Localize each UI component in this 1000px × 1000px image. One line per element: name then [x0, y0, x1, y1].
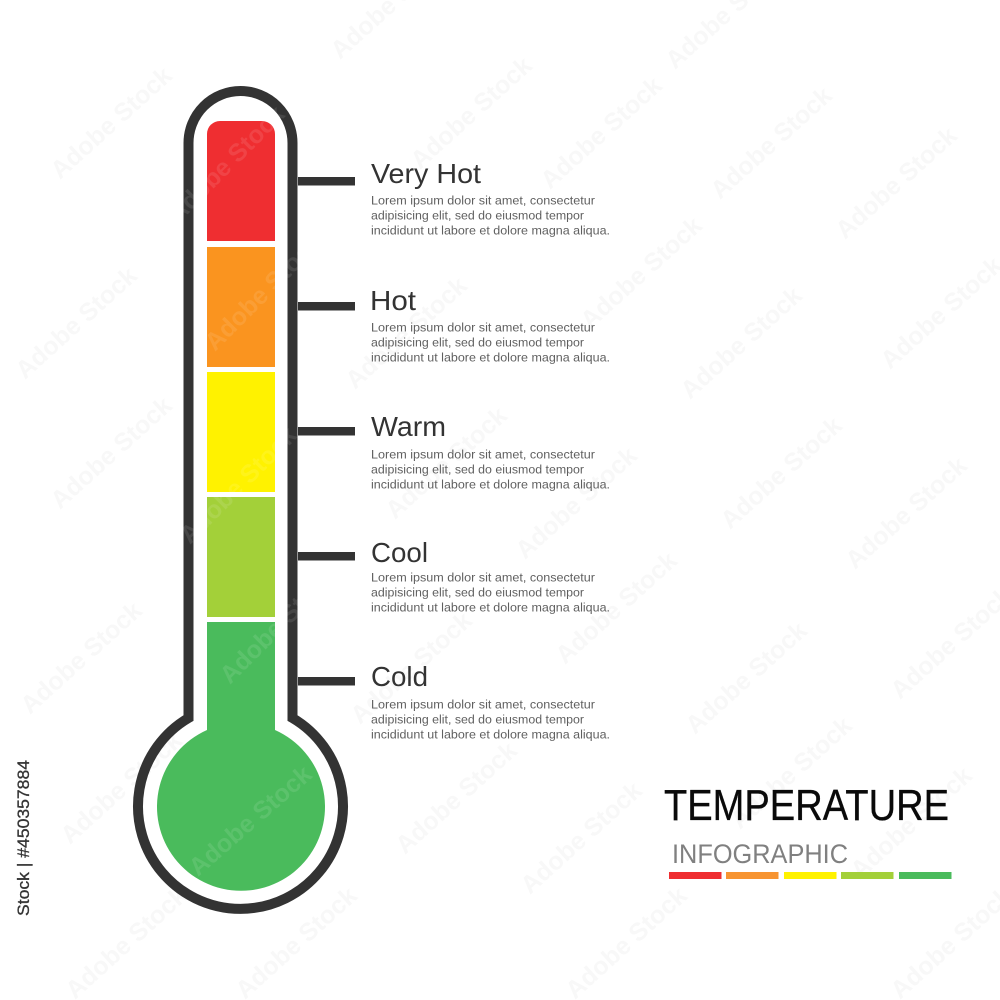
text: Adobe Stock [45, 391, 178, 514]
bar: green [899, 872, 952, 879]
text: Adobe Stock [162, 100, 290, 228]
description: very hot: adipisicing elit, sed do eiusmod tempor [371, 208, 584, 222]
segment: warm [207, 372, 275, 492]
label block: warm [371, 411, 610, 492]
text: Adobe Stock [845, 761, 978, 884]
bar: orange [726, 872, 778, 879]
heading: warm: Warm [371, 411, 446, 442]
text: Adobe Stock [405, 51, 538, 174]
bar: light green [841, 872, 894, 879]
text: Adobe Stock [840, 451, 973, 574]
subtitle: infographic: INFOGRAPHIC [672, 839, 848, 869]
text: Adobe Stock [199, 228, 327, 356]
text: Adobe Stock [390, 736, 523, 859]
description: warm: Lorem ipsum dolor sit amet, consectetur [371, 448, 595, 462]
title: temperature: TEMPERATURE [664, 781, 949, 830]
text: Adobe Stock [575, 211, 708, 334]
text: Adobe Stock [174, 421, 302, 549]
description: very hot: incididunt ut labore et dolore magna aliqua. [371, 224, 610, 238]
label block: hot [370, 285, 610, 364]
text: Adobe Stock [535, 71, 668, 194]
text: Adobe Stock [45, 61, 178, 184]
description: hot: incididunt ut labore et dolore magna aliqua. [371, 350, 610, 364]
tick: warm [298, 427, 355, 436]
text: Adobe Stock [680, 616, 813, 739]
description: cool: incididunt ut labore et dolore magna aliqua. [371, 600, 610, 614]
tick: cool [298, 552, 355, 560]
label block: cool [371, 537, 610, 614]
text: Adobe Stock [830, 121, 963, 244]
description: warm: adipisicing elit, sed do eiusmod tempor [371, 462, 584, 476]
text: Adobe Stock [550, 546, 683, 669]
legend colour bars [669, 872, 952, 879]
description: hot: adipisicing elit, sed do eiusmod tempor [371, 336, 584, 350]
description: warm [371, 448, 610, 492]
description: hot [371, 320, 610, 364]
text: Adobe Stock [345, 606, 478, 729]
bar: yellow [784, 872, 836, 879]
segment: hot [207, 247, 275, 367]
segment: cold with bulb [157, 622, 325, 891]
heading: very hot: Very Hot [371, 158, 481, 189]
heading: hot: Hot [370, 285, 416, 316]
text: Adobe Stock [55, 726, 188, 849]
text: Adobe Stock [675, 281, 808, 404]
description: hot: Lorem ipsum dolor sit amet, consectetur [371, 320, 595, 334]
text: Adobe Stock [510, 441, 643, 564]
text: Adobe Stock [10, 261, 143, 384]
text: Adobe Stock [340, 271, 473, 394]
thermometer outline [138, 91, 343, 909]
label block: cold [371, 661, 610, 742]
description: cool: Lorem ipsum dolor sit amet, consectetur [371, 570, 595, 584]
segment: very hot [207, 121, 275, 241]
description: cool [371, 570, 610, 614]
description: very hot: Lorem ipsum dolor sit amet, consectetur [371, 194, 595, 208]
heading: cool: Cool [371, 537, 428, 568]
description: cold: adipisicing elit, sed do eiusmod tempor [371, 712, 584, 726]
description: cold: incididunt ut labore et dolore magna aliqua. [371, 728, 610, 742]
bar: red [669, 872, 722, 879]
description: cool: adipisicing elit, sed do eiusmod tempor [371, 586, 584, 600]
text: Adobe Stock [715, 411, 848, 534]
thermometer [138, 91, 343, 909]
stock id vertical caption: Stock | #450357884 [14, 760, 33, 916]
text: Adobe Stock [515, 776, 648, 899]
tick: very hot [298, 177, 355, 186]
tick: hot [298, 302, 355, 310]
segment: cool [207, 497, 275, 617]
text: Adobe Stock [15, 596, 148, 719]
text: Adobe Stock [705, 81, 838, 204]
description: cold [371, 698, 610, 742]
description: warm: incididunt ut labore et dolore magna aliqua. [371, 478, 610, 492]
description: very hot [371, 194, 610, 238]
label block: very hot [371, 158, 610, 238]
text: Adobe Stock [214, 561, 342, 689]
description: cold: Lorem ipsum dolor sit amet, consectetur [371, 698, 595, 712]
tick: cold [298, 677, 355, 686]
text: Adobe Stock [184, 760, 317, 882]
heading: cold: Cold [371, 661, 428, 692]
text: Adobe Stock [380, 401, 513, 524]
text: Adobe Stock [725, 711, 858, 834]
